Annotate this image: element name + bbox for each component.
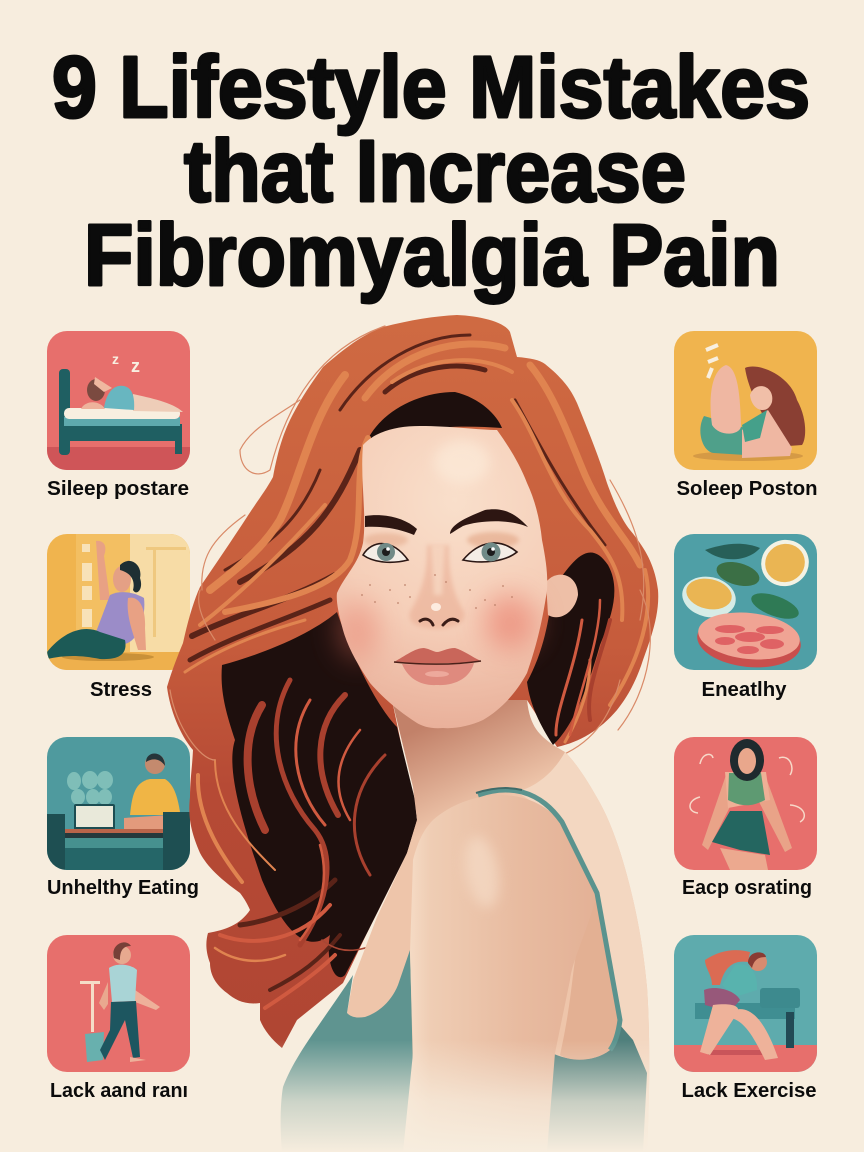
red wave strands [248,620,610,945]
panel: stress icon [47,534,190,670]
hair dark underlayer right [527,552,614,745]
icon: zzz [112,356,140,372]
bottom fade [270,1040,665,1152]
title [52,39,810,304]
label: eacp osrating: Eacp osrating [682,877,812,899]
title: that Increase [184,123,686,220]
icon: zzz: z [131,356,140,376]
flyaway hair strands [170,326,650,760]
lips [394,648,481,663]
panel: sleep posture icon [47,331,190,470]
panel: exercise icon [674,935,817,1072]
panel: lack of rest icon [47,935,190,1072]
hair dark underlayer left [222,612,417,977]
illustration: woman portrait [167,315,665,1152]
tank top strap [478,790,620,1050]
label: lack exercise: Lack Exercise [682,1080,816,1102]
label: sleep posture: Sileep postare [47,478,189,500]
back skin beyond strap [517,752,649,1152]
panel: unhealthy eating icon [47,737,190,870]
teal top: left panel [281,950,415,1152]
ear [546,575,578,617]
label: eneatlhy: Eneatlhy [702,679,787,701]
label: stress: Stress [90,679,152,701]
panel: sleep position icon [674,331,817,470]
hair strands [170,326,650,1008]
panel: standing woman icon [674,737,817,870]
under-arm back skin [560,893,620,1060]
dark streaks in waves [190,335,605,990]
label: sleep position: Soleep Poston [676,478,818,500]
title: 9 Lifestyle Mistakes [52,39,810,136]
label: unhealthy eating: Unhelthy Eating [47,877,199,899]
light orange strands [185,344,648,961]
cheek blush [484,594,536,650]
teal top: right panel [545,1025,647,1152]
icon: zzz: z [112,351,119,367]
eyebrows [365,515,417,535]
neck and back skin [347,700,649,1152]
panel: healthy food icon [674,532,817,672]
hair silhouette [167,315,658,1048]
freckles [361,574,513,609]
arm and shoulder [403,795,597,1152]
eyes [363,544,408,562]
bangs dark underside [364,392,502,448]
nose bridge [410,545,464,629]
title: Fibromyalgia Pain [84,207,780,304]
eye shadows [467,532,519,548]
face [337,426,547,728]
label: lack and rain: Lack aand ranı [50,1080,188,1102]
forehead highlight [434,440,490,484]
